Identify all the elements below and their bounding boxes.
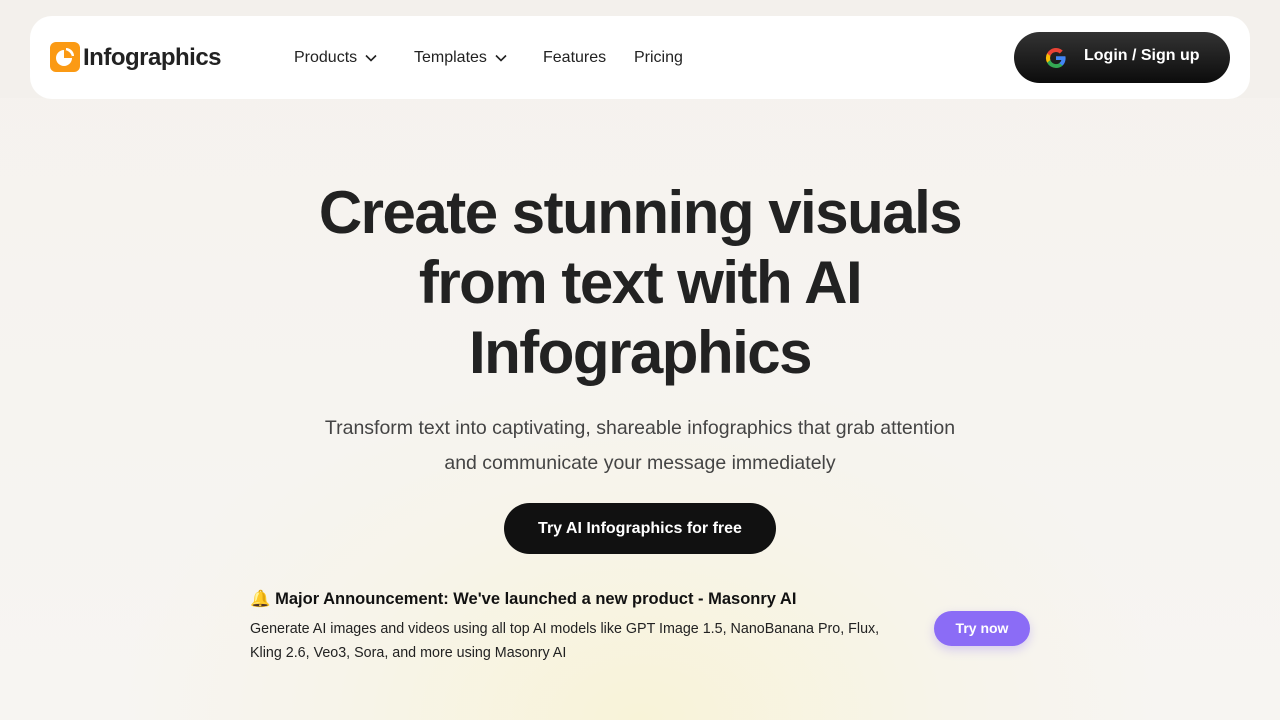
title: [319, 179, 961, 386]
try now button: Try now: [956, 620, 1008, 636]
logo: Infographics: [83, 44, 221, 71]
announcement: [250, 590, 1034, 661]
title: Create stunning visuals: [319, 179, 961, 246]
nav links: Templates: [414, 49, 487, 66]
subtitle: [325, 417, 955, 474]
icon: logo pie: [50, 42, 80, 72]
login button: Login / Sign up: [1084, 47, 1200, 64]
cta button: [504, 503, 776, 554]
announcement heading: 🔔 Major Announcement: We've launched a new product - Masonry AI: [250, 590, 796, 608]
title: Infographics: [469, 319, 811, 386]
nav links: Products: [294, 49, 357, 66]
nav links: [294, 49, 683, 66]
subtitle: Transform text into captivating, shareable infographics that grab attention: [325, 417, 955, 439]
announcement text: Kling 2.6, Veo3, Sora, and more using Masonry AI: [250, 645, 566, 661]
announcement text: Generate AI images and videos using all top AI models like GPT Image 1.5, NanoBanana Pro, Flux,: [250, 621, 879, 637]
cta button: Try AI Infographics for free: [538, 520, 742, 537]
nav links: Pricing: [634, 49, 683, 66]
nav links: Features: [543, 49, 606, 66]
navbar: [30, 16, 1250, 99]
login button: [1014, 32, 1230, 83]
subtitle: and communicate your message immediately: [444, 452, 836, 474]
title: from text with AI: [419, 249, 861, 316]
announcement text: [250, 621, 879, 661]
try now button: [934, 611, 1030, 646]
icon: google: [1046, 48, 1066, 68]
